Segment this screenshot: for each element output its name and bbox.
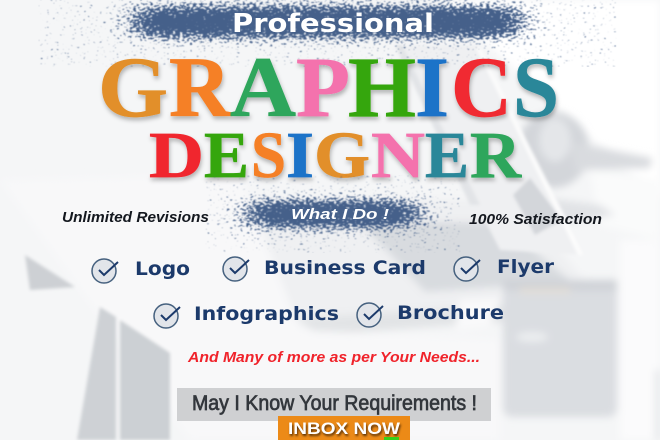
banner text: What I Do ! <box>291 206 389 223</box>
text: 100% Satisfaction: 100% Satisfaction <box>469 211 602 228</box>
title: GRAPHICS: R <box>169 39 232 135</box>
item: Infographics: Infographics <box>194 303 339 325</box>
title: DESIGNER: E <box>425 119 469 192</box>
item: Flyer: Flyer <box>497 256 555 278</box>
title: DESIGNER: I <box>286 119 314 192</box>
item: Infographics <box>154 303 339 328</box>
desk legs <box>25 255 75 290</box>
item: Business Card: Business Card <box>264 257 426 279</box>
item: Flyer <box>454 256 555 281</box>
title: GRAPHICS: G <box>98 39 168 135</box>
title: GRAPHICS: I <box>415 39 449 135</box>
banner text: Professional <box>232 9 434 39</box>
title: GRAPHICS: S <box>513 39 559 135</box>
title: GRAPHICS: H <box>348 39 416 135</box>
icon: check <box>357 303 383 327</box>
title: DESIGNER: D <box>149 119 204 192</box>
requirements banner <box>177 388 491 421</box>
requirements banner: May I Know Your Requirements ! <box>192 392 477 415</box>
title: GRAPHICS <box>98 39 559 135</box>
lower desk <box>0 175 500 440</box>
title: DESIGNER: N <box>371 119 425 192</box>
icon: check <box>223 257 249 281</box>
icon: check <box>92 259 118 283</box>
headphones <box>517 112 589 188</box>
cup <box>503 280 617 417</box>
laptop base and keyboard <box>232 200 600 318</box>
button: INBOX NOW <box>278 416 410 440</box>
title: DESIGNER: S <box>251 119 286 192</box>
heading banner brush: Professional <box>135 7 520 39</box>
icon: check <box>454 257 480 281</box>
text: Unlimited Revisions: Unlimited Revisions <box>62 209 209 226</box>
item: Brochure <box>357 302 504 327</box>
title: DESIGNER: E <box>204 119 249 192</box>
icon: check <box>154 304 180 328</box>
button: INBOX NOW: INBOX NOW <box>288 419 401 438</box>
title: GRAPHICS: A <box>230 39 296 135</box>
title: DESIGNER: G <box>314 119 370 192</box>
item: Logo <box>92 258 190 283</box>
item: Logo: Logo <box>135 258 190 280</box>
title: DESIGNER: R <box>470 119 522 192</box>
red note text: And Many of more as per Your Needs... <box>187 349 480 366</box>
item: Business Card <box>223 257 426 281</box>
title: DESIGNER <box>149 119 522 192</box>
laptop screen <box>395 45 585 255</box>
item: Brochure: Brochure <box>397 302 504 324</box>
title: GRAPHICS: P <box>296 39 350 135</box>
banner brush: What I Do <box>248 201 418 227</box>
title: GRAPHICS: C <box>451 39 512 135</box>
